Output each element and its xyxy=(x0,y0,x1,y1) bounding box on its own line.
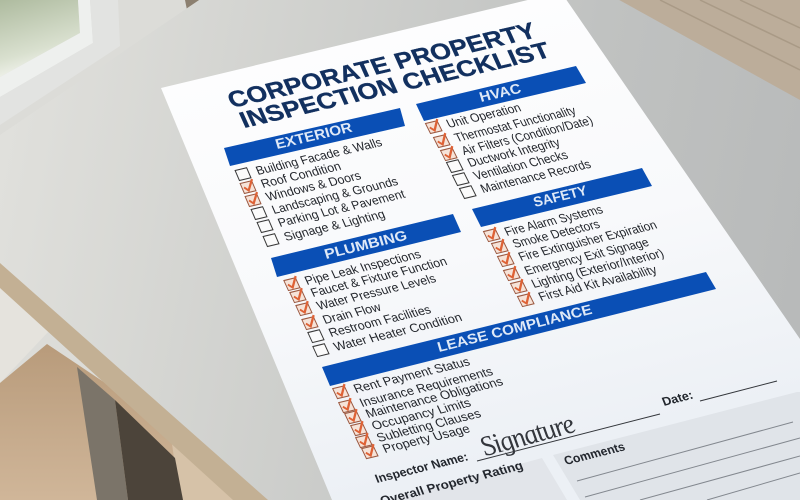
signature: Signature xyxy=(474,409,582,462)
heading bar: lease compliance: LEASE COMPLIANCE xyxy=(435,301,594,355)
heading bar: plumbing: PLUMBING xyxy=(322,227,409,262)
heading bar: exterior: EXTERIOR xyxy=(273,119,354,152)
panel: exterior xyxy=(224,108,408,248)
checklist: exterior: Landscaping & Grounds xyxy=(270,174,400,217)
checklist: safety xyxy=(483,202,666,308)
checklist paper xyxy=(161,0,800,500)
inspector name and signature xyxy=(373,409,660,486)
checklist: exterior: Building Facade & Walls xyxy=(254,135,384,178)
checklist: hvac: Ventilation Checks xyxy=(471,148,570,183)
checklist: plumbing: Restroom Facilities xyxy=(326,302,433,340)
heading bar: exterior xyxy=(224,108,405,166)
checklist: lease compliance: Subletting Clauses xyxy=(374,406,483,445)
checklist: hvac: Unit Operation xyxy=(444,101,524,131)
title xyxy=(223,17,554,133)
table leg xyxy=(77,367,183,500)
heading bar: hvac: HVAC xyxy=(477,80,523,105)
checklist: safety: Smoke Detectors xyxy=(510,217,602,251)
window frame xyxy=(0,0,93,97)
checklist: safety: Fire Extinguisher Expiration xyxy=(516,218,660,264)
table edge xyxy=(0,262,270,500)
heading bar: safety: SAFETY xyxy=(531,182,590,210)
checklist: lease compliance: Maintenance Obligations xyxy=(363,374,505,421)
heading bar: safety xyxy=(472,168,652,227)
checklist: exterior: Windows & Doors xyxy=(264,169,363,204)
comments heading: Comments xyxy=(562,440,627,468)
checklist: lease compliance: Rent Payment Status xyxy=(351,355,472,396)
heading bar: hvac xyxy=(416,66,586,121)
wooden floor xyxy=(0,344,280,500)
date field: Date: xyxy=(660,388,695,409)
checklist: safety: First Aid Kit Availability xyxy=(536,262,660,304)
checklist: hvac: Air Filters (Condition/Date) xyxy=(459,114,595,158)
checklist: safety: Fire Alarm Systems xyxy=(502,202,605,239)
checklist: hvac: Thermostat Functionality xyxy=(452,103,579,145)
checklist: lease compliance xyxy=(332,354,505,460)
checklist: hvac xyxy=(425,100,595,200)
checklist: exterior: Roof Condition xyxy=(259,159,343,191)
wood top right xyxy=(600,0,800,110)
heading bar: lease compliance xyxy=(322,272,716,386)
checklist: exterior: Signage & Lighting xyxy=(282,207,387,244)
checklist: plumbing xyxy=(283,247,464,358)
inspector name label: Inspector Name: xyxy=(373,450,470,486)
date field xyxy=(660,381,777,409)
checklist: lease compliance: Property Usage xyxy=(380,422,473,456)
checklist: hvac: Ductwork Integrity xyxy=(465,135,563,170)
checklist: hvac: Maintenance Records xyxy=(478,157,593,196)
panel: lease compliance xyxy=(322,272,716,460)
checklist: exterior: Parking Lot & Pavement xyxy=(276,187,408,230)
checklist: plumbing: Water Heater Condition xyxy=(331,310,464,354)
comments panel xyxy=(553,392,800,500)
title: CORPORATE PROPERTY xyxy=(223,17,540,113)
checklist: plumbing: Drain Flow xyxy=(320,300,383,327)
checklist: lease compliance: Insurance Requirements xyxy=(357,364,495,410)
panel: plumbing xyxy=(271,214,464,358)
checklist: plumbing: Water Pressure Levels xyxy=(314,271,438,313)
checklist: exterior xyxy=(235,135,408,248)
panel: hvac xyxy=(416,66,595,200)
window glass xyxy=(0,0,80,77)
checklist: lease compliance: Occupancy Limits xyxy=(369,396,473,433)
checklist: plumbing: Faucet & Fixture Function xyxy=(308,254,449,300)
checklist: safety: Emergency Exit Signage xyxy=(522,235,652,278)
heading bar: plumbing xyxy=(271,214,461,277)
checklist: plumbing: Pipe Leak Inspections xyxy=(302,247,423,288)
checklist: safety: Lighting (Exterior/Interior) xyxy=(529,246,666,291)
panel: safety xyxy=(472,168,666,308)
overall property rating panel xyxy=(378,458,567,500)
wall below table xyxy=(0,280,50,383)
title: INSPECTION CHECKLIST xyxy=(235,37,554,133)
